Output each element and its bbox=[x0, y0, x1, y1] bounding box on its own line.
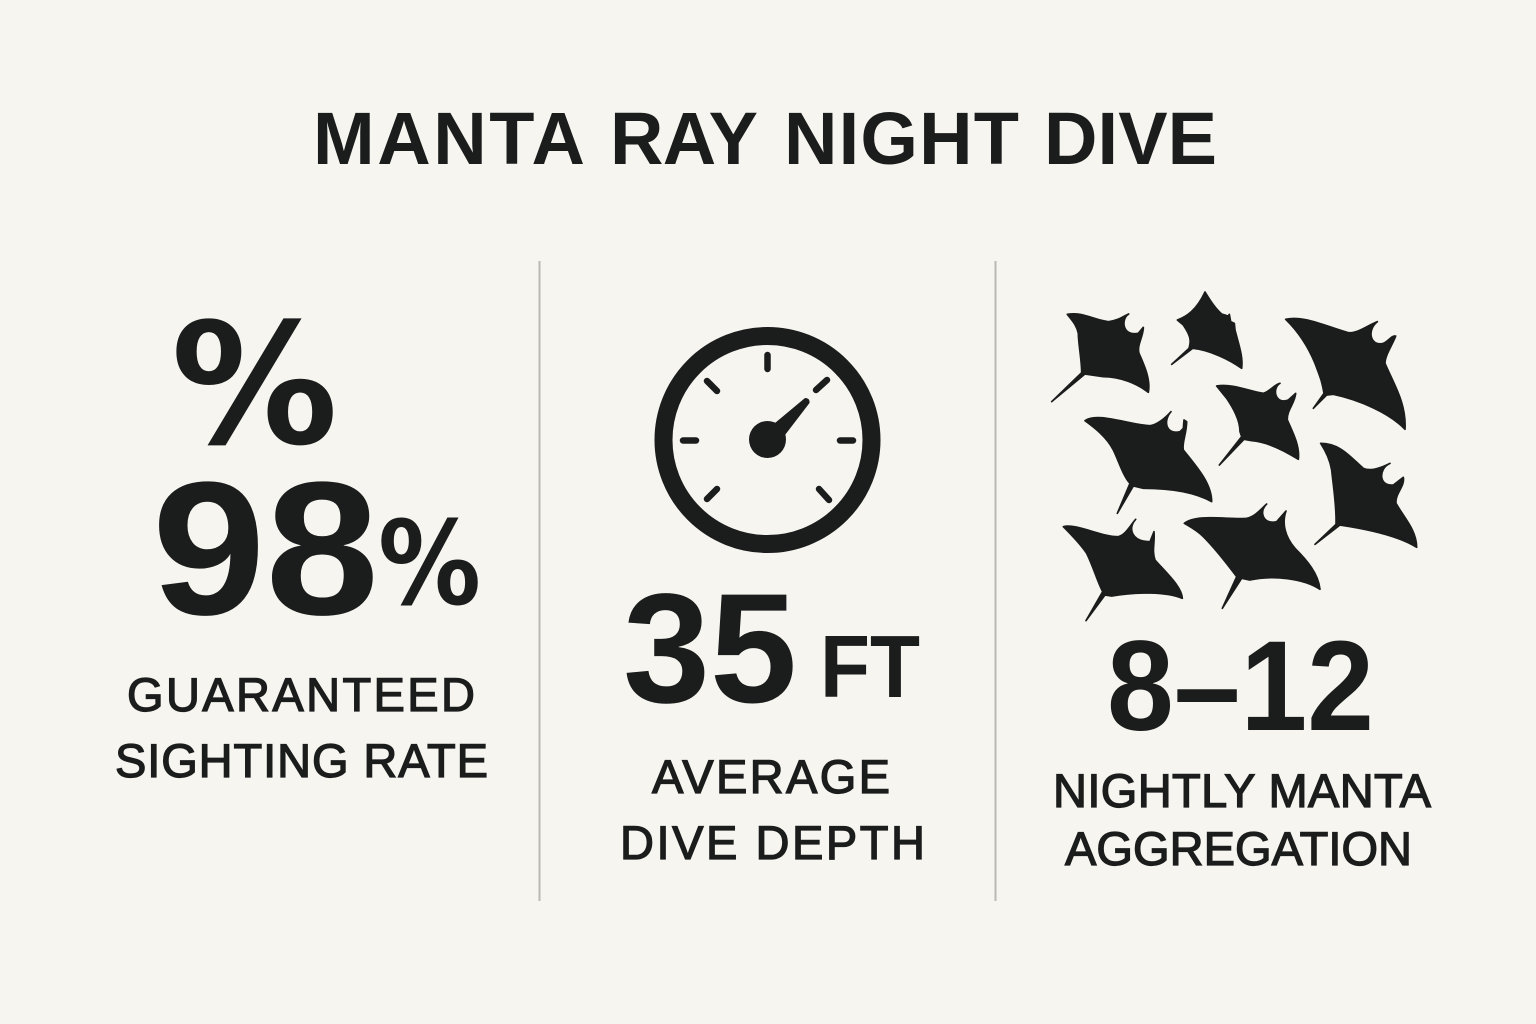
label: guaranteed sighting rate: SIGHTING RATE bbox=[115, 734, 488, 787]
label: average dive depth: AVERAGE bbox=[652, 750, 890, 803]
title: NIGHT bbox=[784, 97, 1019, 180]
label: nightly manta aggregation bbox=[1053, 764, 1432, 875]
icon: large percent sign: % bbox=[171, 287, 338, 483]
panel: guaranteed sighting rate bbox=[115, 287, 488, 787]
panel: nightly manta aggregation bbox=[1052, 292, 1432, 875]
label: nightly manta aggregation: NIGHTLY MANTA bbox=[1053, 764, 1432, 817]
title: MANTA bbox=[313, 97, 585, 180]
label: average dive depth: DIVE DEPTH bbox=[620, 816, 925, 869]
icon: school of manta rays bbox=[1052, 292, 1417, 621]
label: average dive depth bbox=[620, 750, 925, 869]
title: RAY bbox=[610, 97, 758, 180]
stat: 98 percent: 98 bbox=[152, 443, 379, 655]
stat: 98 percent: % bbox=[378, 497, 481, 632]
stat: 35 ft bbox=[623, 562, 920, 736]
panel: average dive depth bbox=[620, 336, 925, 869]
stat: 98 percent bbox=[152, 443, 481, 655]
icon: depth gauge bbox=[664, 336, 872, 544]
stat: 35 ft: FT bbox=[820, 617, 920, 716]
title bbox=[313, 97, 1217, 180]
stat: 8 to 12: 8–12 bbox=[1107, 615, 1374, 758]
label: guaranteed sighting rate: GUARANTEED bbox=[127, 668, 475, 721]
title: DIVE bbox=[1044, 97, 1217, 180]
stat: 35 ft: 35 bbox=[623, 562, 797, 736]
label: nightly manta aggregation: AGGREGATION bbox=[1065, 822, 1412, 875]
label: guaranteed sighting rate bbox=[115, 668, 488, 787]
